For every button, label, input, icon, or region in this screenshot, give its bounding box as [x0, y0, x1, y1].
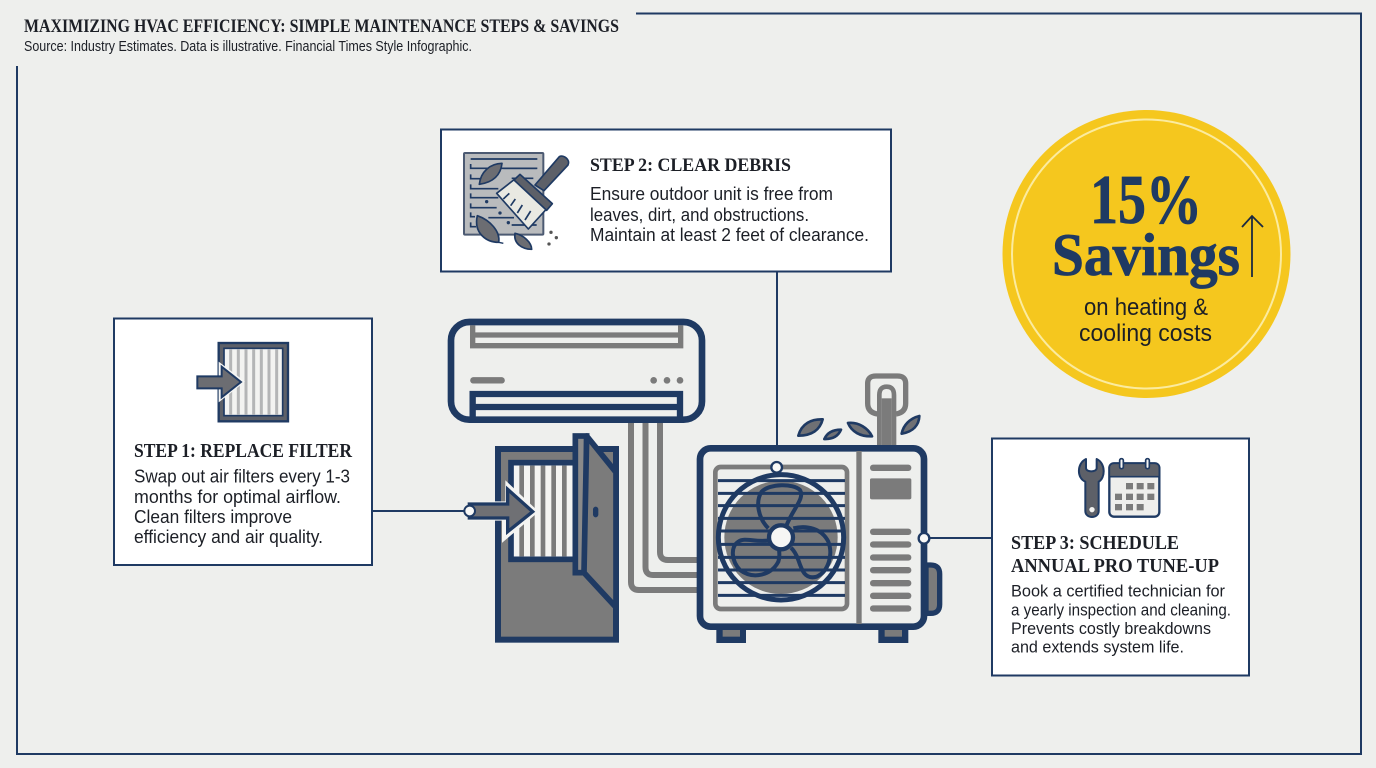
connector: step 1 to furnace	[372, 510, 466, 512]
step 3 heading: STEP 3: SCHEDULE	[1011, 533, 1179, 554]
source note: Source: Industry Estimates. Data is illustrative. Financial Times Style Infographic.	[24, 39, 472, 55]
panel: step 2 clear debris	[441, 130, 891, 272]
step 2 heading: STEP 2: CLEAR DEBRIS	[590, 155, 791, 176]
step 2 body	[590, 184, 869, 245]
icon: vent with brush and leaves	[464, 153, 569, 249]
refrigerant pipes	[631, 423, 700, 590]
icon: filter with arrow	[197, 343, 288, 421]
savings caption: on heating &	[1084, 294, 1208, 321]
icon: wrench and calendar	[1079, 459, 1159, 517]
step 1 body: efficiency and air quality.	[134, 527, 323, 547]
step 3 heading	[1011, 533, 1219, 577]
savings caption: cooling costs	[1079, 320, 1212, 347]
leaves above unit	[798, 416, 919, 439]
step 3 body: Prevents costly breakdowns	[1011, 619, 1211, 638]
outdoor condenser unit	[700, 376, 940, 640]
step 1 body: months for optimal airflow.	[134, 487, 341, 507]
furnace with filter	[464, 436, 616, 640]
step 1 body	[134, 466, 350, 547]
step 3 body: a yearly inspection and cleaning.	[1011, 600, 1231, 620]
step 2 body: Ensure outdoor unit is free from	[590, 184, 833, 204]
arrow: upward savings	[1242, 216, 1263, 277]
indoor wall unit	[451, 322, 702, 420]
step 2 body: leaves, dirt, and obstructions.	[590, 205, 809, 225]
step 2 body: Maintain at least 2 feet of clearance.	[590, 225, 869, 245]
connector: step 2 to fan	[776, 271, 778, 468]
step 3 heading: ANNUAL PRO TUNE-UP	[1011, 556, 1219, 577]
savings word: Savings	[1052, 222, 1240, 288]
connector: step 3 to outdoor unit	[924, 537, 991, 539]
step 1 body: Clean filters improve	[134, 507, 292, 527]
step 3 body: Book a certified technician for	[1011, 582, 1225, 600]
savings caption	[1079, 294, 1212, 347]
panel: step 3 annual tune-up	[992, 438, 1249, 676]
savings badge	[1002, 110, 1290, 398]
step 1 heading: STEP 1: REPLACE FILTER	[134, 440, 352, 462]
step 3 body	[1011, 582, 1231, 656]
step 1 body: Swap out air filters every 1-3	[134, 466, 350, 486]
title: MAXIMIZING HVAC EFFICIENCY: SIMPLE MAINTENANCE STEPS & SAVINGS	[24, 16, 619, 37]
savings figure: 15%	[1090, 162, 1202, 239]
fan guard bars	[718, 481, 845, 595]
panel: step 1 replace filter	[114, 318, 372, 565]
step 3 body: and extends system life.	[1011, 638, 1184, 656]
